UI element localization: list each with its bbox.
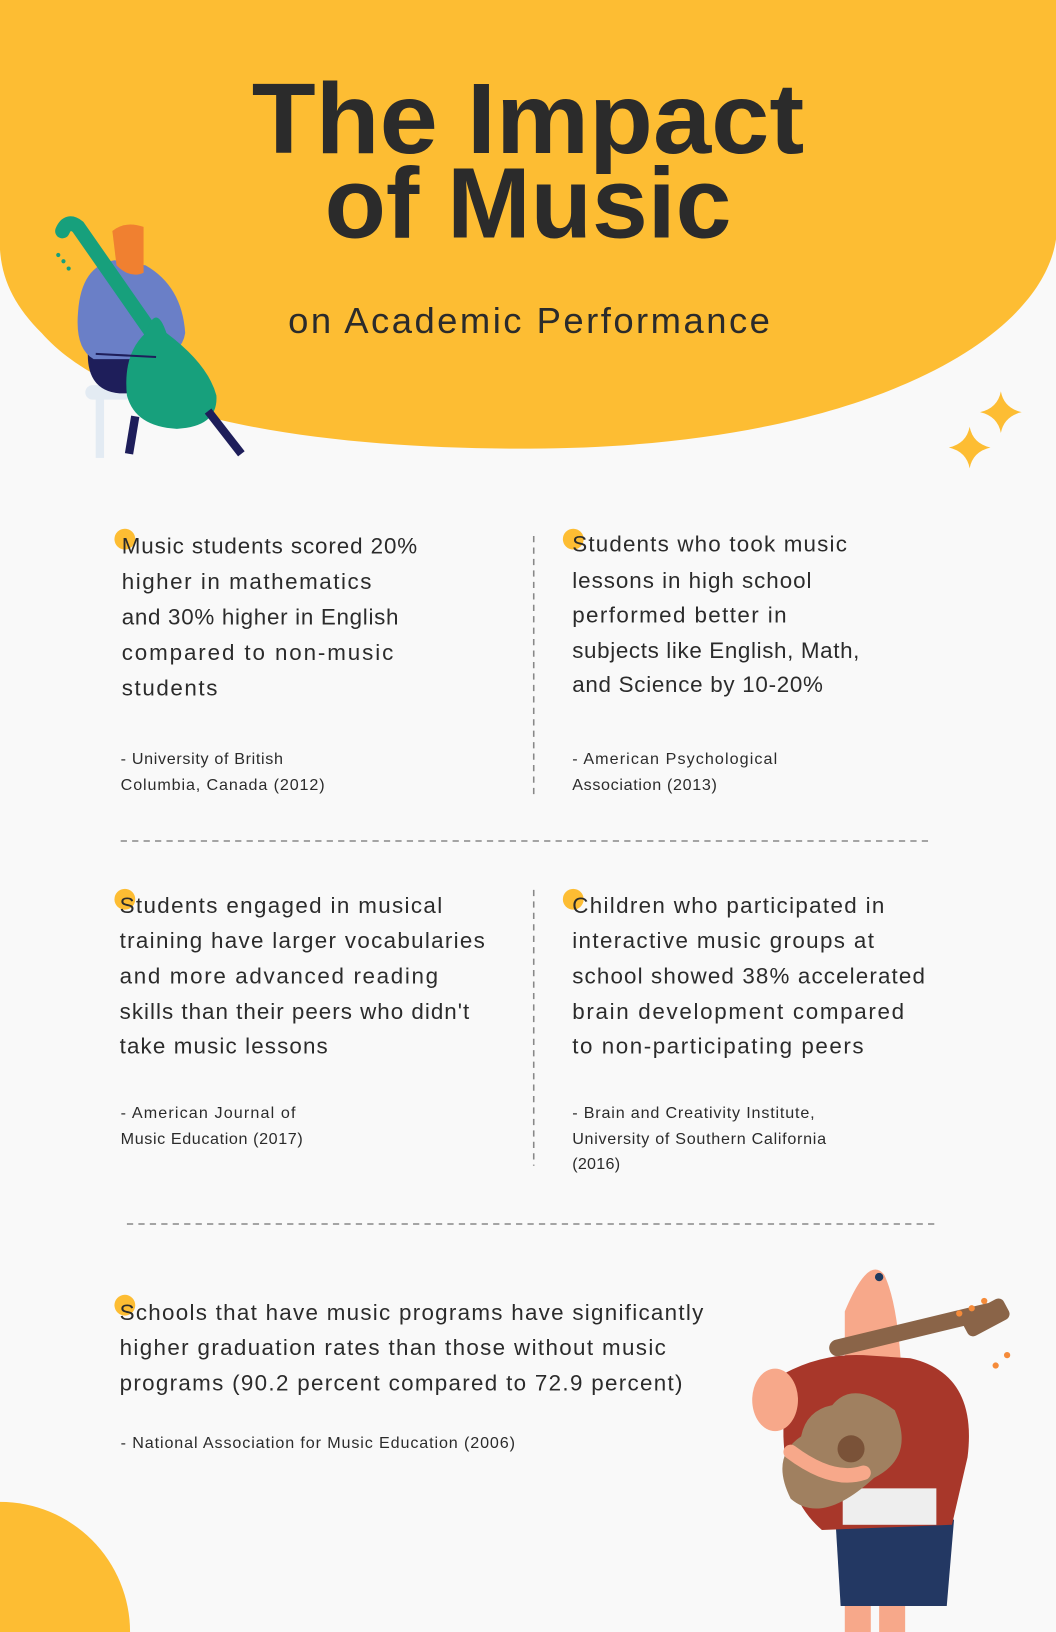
panel: stat 2: subjects like English, Math,	[572, 638, 859, 663]
panel: stat 4: interactive music groups at	[572, 928, 875, 953]
icon: sparkles	[949, 391, 1022, 468]
panel: stat 1: Music students scored 20%	[122, 534, 417, 559]
panel: stat 3: skills than their peers who didn't	[120, 999, 470, 1024]
title: of Music	[325, 148, 731, 259]
bottom-left quarter circle	[0, 1502, 130, 1632]
panel: stat 4: University of Southern California	[572, 1130, 826, 1148]
panel: stat 1: compared to non-music	[122, 640, 393, 665]
panel: stat 2: - American Psychological	[572, 750, 777, 768]
panel: stat 2: and Science by 10-20%	[572, 672, 823, 697]
panel: stat 2: Students who took music	[572, 532, 847, 557]
title	[252, 64, 804, 259]
panel: stat 1: Columbia, Canada (2012)	[121, 776, 325, 794]
panel: stat 5: Schools that have music programs have significantly	[120, 1300, 704, 1325]
panel: stat 4: brain development compared	[572, 999, 904, 1024]
panel: stat 3: - American Journal of	[121, 1104, 296, 1122]
panel: stat 3	[114, 889, 485, 1148]
panel: stat 2: Association (2013)	[572, 776, 717, 794]
divider lines	[121, 536, 938, 1224]
panel: stat 1: - University of British	[121, 750, 283, 768]
panel: stat 3: take music lessons	[120, 1033, 328, 1058]
panel: stat 1	[114, 529, 417, 794]
illustration: guitarist	[752, 1269, 1012, 1632]
panel: stat 4: Children who participated in	[572, 893, 884, 918]
panel: stat 5: - National Association for Music Education (2006)	[121, 1434, 515, 1452]
panel: stat 2: lessons in high school	[572, 568, 812, 593]
panel: stat 1: and 30% higher in English	[122, 604, 398, 629]
panel: stat 4	[563, 889, 925, 1173]
panel: stat 1: students	[122, 675, 217, 700]
panel: stat 5: higher graduation rates than those without music	[120, 1335, 666, 1360]
panel: stat 2: performed better in	[572, 602, 787, 627]
panel: stat 2	[563, 529, 859, 794]
panel: stat 5	[114, 1295, 704, 1452]
panel: stat 4: school showed 38% accelerated	[572, 964, 925, 989]
panel: stat 3: training have larger vocabularies	[120, 928, 485, 953]
subtitle: on Academic Performance	[288, 300, 770, 341]
panel: stat 4: - Brain and Creativity Institute,	[572, 1104, 815, 1122]
panel: stat 4: (2016)	[572, 1155, 620, 1173]
panel: stat 4: to non-participating peers	[572, 1033, 864, 1058]
panel: stat 3: and more advanced reading	[120, 964, 438, 989]
title: The Impact	[252, 64, 804, 175]
panel: stat 3: Students engaged in musical	[120, 893, 442, 918]
panel: stat 1: higher in mathematics	[122, 569, 371, 594]
illustration: cellist	[56, 224, 241, 458]
header yellow blob	[0, 0, 1056, 449]
panel: stat 5: programs (90.2 percent compared to 72.9 percent)	[120, 1371, 682, 1396]
panel: stat 3: Music Education (2017)	[121, 1130, 303, 1148]
